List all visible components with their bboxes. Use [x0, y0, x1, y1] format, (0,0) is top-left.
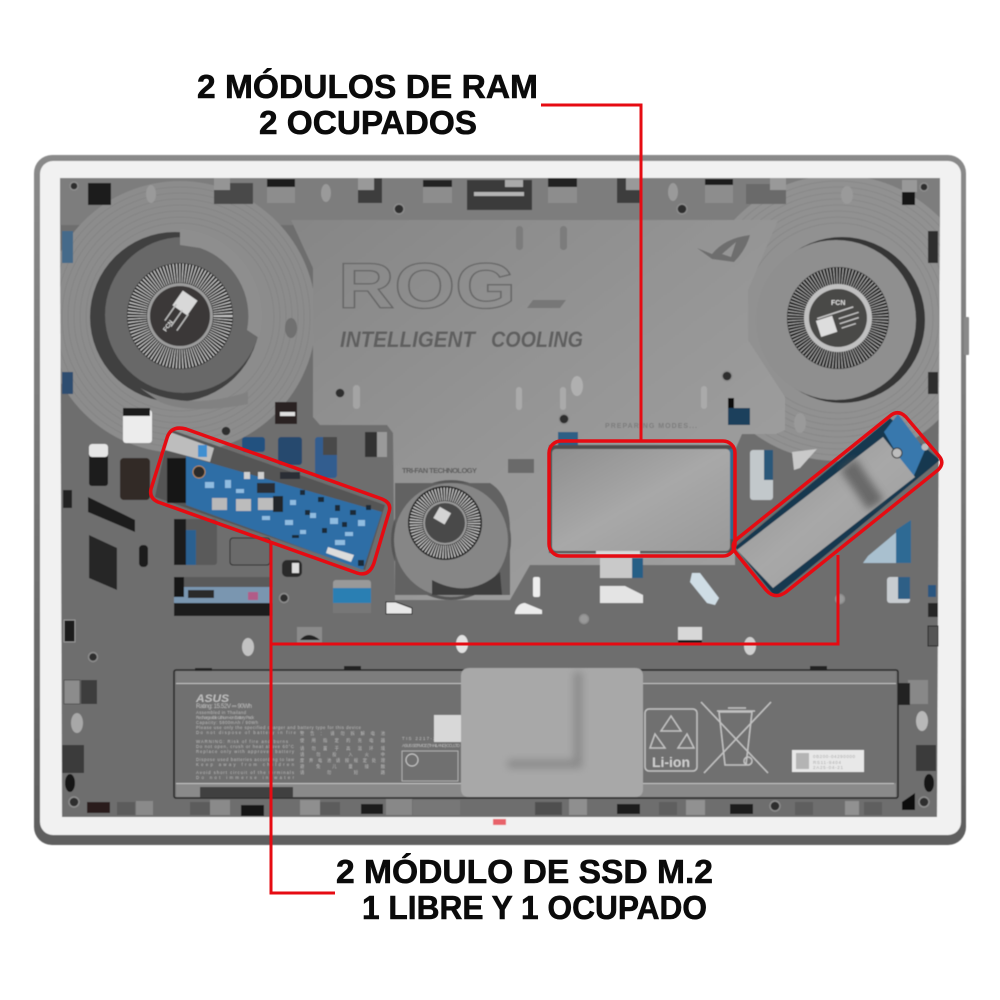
left SSD bay: PCB	[155, 430, 385, 570]
battery label text: 请勿置于高温环境	[300, 745, 386, 752]
battery label text: Assembled in Thailand	[196, 710, 247, 715]
PREPARING text: PREPARING MODES...	[605, 423, 697, 430]
heading: RAM callout: 2 MÓDULOS DE RAM	[197, 68, 538, 105]
silver patch	[461, 668, 643, 797]
battery label text: 避免儿童接触	[300, 763, 386, 770]
white barcode label: RS11-9404	[813, 760, 841, 765]
center fan	[391, 480, 511, 600]
battery label text: Rating: 15.52V ⎓ 90Wh	[196, 704, 252, 710]
battery label text: 使用指定的充电器	[300, 737, 386, 744]
battery label text: 请勿短路	[300, 769, 386, 776]
fan impeller	[787, 267, 889, 369]
TRI-FAN text: TRI-FAN TECHNOLOGY	[402, 466, 477, 475]
heading: RAM callout: 2 OCUPADOS	[259, 104, 477, 141]
chassis interior	[60, 178, 940, 817]
INTELLIGENT COOLING text	[340, 327, 583, 352]
arrow: SSD leader lines	[271, 543, 838, 893]
right fan shroud	[734, 178, 940, 462]
white barcode label: 0B200-04290000	[813, 754, 855, 759]
heading: SSD callout: 1 LIBRE Y 1 OCUPADO	[362, 889, 707, 926]
certification mark	[402, 751, 458, 781]
left cutouts	[62, 398, 750, 773]
battery label text: Do not immerse in water	[196, 775, 295, 780]
QR code	[434, 715, 462, 742]
ROG cooling plate	[291, 220, 785, 600]
QR mark	[508, 459, 534, 473]
left fan shroud	[44, 181, 316, 453]
hatch accent	[527, 300, 566, 308]
battery	[174, 666, 898, 798]
battery label text: 废弃电池请按规定处理	[300, 757, 386, 764]
fan impeller: FCN	[163, 320, 175, 333]
battery label text: WARNING: Risk of fire and burns	[196, 739, 288, 744]
laptop outer frame	[34, 155, 966, 845]
top band cutouts	[62, 178, 938, 394]
battery label text: Avoid short circuit of the terminals	[196, 770, 294, 775]
highlight: right SSD box	[733, 413, 942, 596]
battery label text: Rechargeable Lithium-ion Battery Pack	[196, 715, 255, 720]
battery label text: Keep away from children	[196, 762, 295, 767]
battery label text: Do not open, crush or heat above 60°C	[196, 744, 294, 749]
highlight: left SSD box	[151, 428, 390, 574]
battery label text: 请勿投入火中	[300, 751, 385, 758]
arrow: RAM leader line	[541, 105, 641, 441]
plate slots	[353, 226, 707, 410]
photo: laptop underside	[34, 155, 981, 845]
teardrop holes	[65, 183, 934, 792]
bottom band tabs	[87, 793, 915, 816]
battery label text: TIS 2217-2548	[402, 736, 447, 741]
battery label text: Capacity: 5800mAh / 90Wh	[196, 720, 259, 725]
RAM bay: shield	[549, 445, 734, 557]
battery label text: Dispose used batteries according to law	[196, 757, 295, 762]
battery label text: ASUS	[195, 693, 230, 705]
battery label text: 警告：请勿拆解电池	[300, 730, 386, 737]
right SSD bay: shield	[735, 414, 940, 597]
ROG eye logo	[697, 235, 750, 262]
red tag	[493, 819, 506, 825]
heading: RAM callout	[197, 68, 538, 141]
highlight: RAM box	[549, 441, 735, 556]
battery label text: ASUS SERVICE (THAILAND) CO., LTD	[402, 743, 461, 748]
fan impeller: FCN	[831, 300, 845, 307]
ROG wordmark: ROG	[338, 250, 516, 322]
center and right cutouts	[515, 449, 938, 771]
heading: SSD callout	[336, 853, 713, 926]
battery label text	[195, 693, 461, 780]
white barcode label	[792, 750, 864, 772]
heading: SSD callout: 2 MÓDULO DE SSD M.2	[336, 853, 713, 890]
side button	[964, 317, 969, 355]
recycle Li-ion icon	[645, 709, 697, 771]
white bezel	[40, 161, 961, 835]
white barcode label: 2A25-04-21	[813, 765, 843, 770]
crossed-out bin icon	[701, 702, 771, 773]
battery label text: Replace only with approved battery	[196, 749, 295, 754]
recycle Li-ion icon: Li-ion	[652, 754, 690, 770]
INTELLIGENT COOLING text: COOLING	[491, 327, 583, 352]
top band	[60, 178, 940, 225]
INTELLIGENT COOLING text: INTELLIGENT	[340, 327, 476, 352]
screws	[69, 182, 929, 812]
battery label text: Please use only the specified charger and battery type for this device	[196, 725, 362, 730]
fan impeller	[127, 263, 233, 369]
battery label text: Do not dispose of battery in fire	[196, 730, 297, 735]
